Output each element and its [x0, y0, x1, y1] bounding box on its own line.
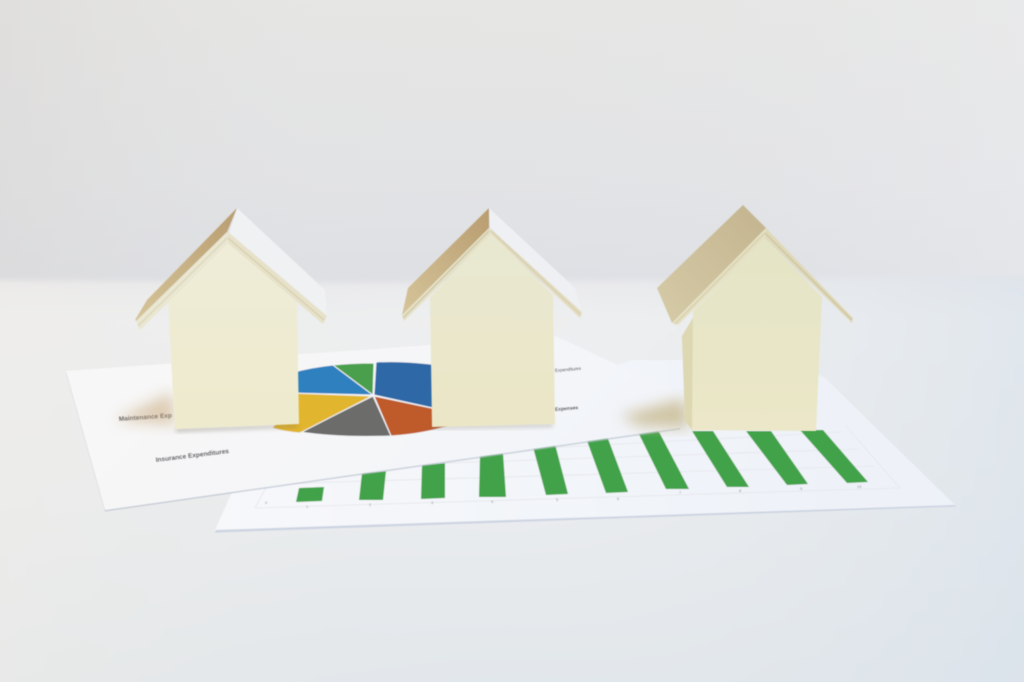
sheet labels: [119, 366, 582, 464]
wall background: [0, 0, 1024, 300]
axis labels: 3: [431, 500, 434, 505]
axis labels: 8: [739, 488, 742, 493]
sheet labels: Expenditures: [555, 366, 582, 373]
pie chart sheet: [66, 336, 684, 512]
axis labels: 5: [556, 497, 559, 502]
axis labels: 7: [679, 490, 682, 495]
sheet labels: Maintenance Exp: [119, 412, 172, 423]
axis labels: 6: [617, 496, 620, 501]
house 2: [402, 208, 582, 427]
house 3 side wall: [682, 316, 694, 431]
pie chart: [272, 362, 460, 436]
chart sheet: bar chart: [215, 360, 956, 532]
house 2 body: [430, 233, 555, 427]
table surface: [0, 276, 1024, 682]
axis labels: 1: [306, 504, 309, 509]
house 2 roof: [402, 208, 582, 321]
house 3 body: [692, 238, 822, 431]
house 3 roof: [657, 205, 853, 325]
axis labels: [265, 484, 862, 509]
house 1 roof: [135, 208, 327, 330]
house 1 body: [168, 240, 299, 429]
shadows: [115, 392, 690, 432]
green bars: [296, 428, 868, 502]
axis labels: 9: [800, 486, 803, 491]
axis labels: 2: [369, 502, 372, 507]
axis labels: 10: [857, 484, 862, 489]
axis labels: 0: [265, 500, 268, 505]
grid lines: [255, 425, 900, 508]
sheet labels: Insurance Expenditures: [155, 448, 230, 464]
house 1: [135, 208, 327, 429]
axis labels: 4: [491, 499, 494, 504]
sheet labels: Expenses: [555, 405, 579, 413]
house 3: [657, 205, 853, 431]
